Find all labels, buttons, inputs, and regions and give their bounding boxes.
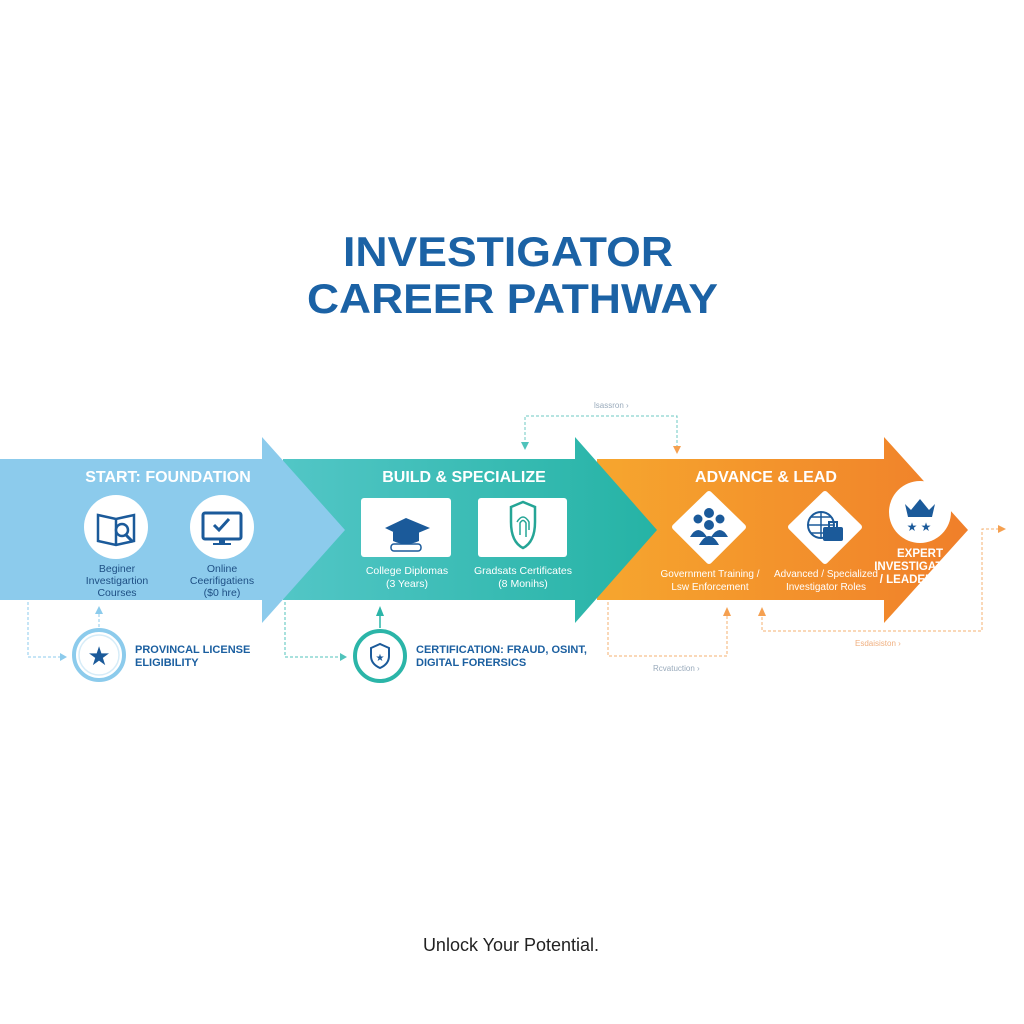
title: INVESTIGATOR	[343, 228, 673, 275]
text: expert investigator: EXPERT	[897, 548, 943, 560]
icon: graduation cap card	[361, 498, 451, 557]
text: expert investigator: / LEADERSHIP	[880, 574, 961, 586]
arrow: build & specialize: BUILD & SPECIALIZE	[382, 469, 546, 486]
text: graduate certificates: (8 Monihs)	[498, 578, 548, 590]
arrow: advance & lead	[597, 437, 968, 623]
arrow: start foundation	[0, 437, 345, 623]
text: beginner courses: Beginer	[99, 563, 136, 575]
text: expert investigator: INVESTIGATOR /	[874, 561, 967, 573]
arrow: start foundation: START: FOUNDATION	[85, 469, 251, 486]
icon: monitor	[190, 495, 254, 559]
text: graduate certificates: Gradsats Certificates	[474, 565, 572, 577]
text: online certifications: Ceerifigatiens	[190, 575, 254, 587]
badge: provincial license	[74, 630, 250, 680]
text: beginner courses: Investigartion	[86, 575, 148, 587]
icon: globe briefcase diamond	[791, 494, 859, 561]
text: beginner courses: Courses	[97, 587, 137, 599]
text: college diplomas: (3 Years)	[386, 578, 428, 590]
text: government training: Lsw Enforcement	[671, 582, 749, 593]
arrow: advance & lead: ADVANCE & LEAD	[695, 469, 837, 486]
badge: provincial license: ELIGIBILITY	[135, 657, 199, 669]
icon: crown circle	[889, 481, 951, 543]
small faint labels: Esdaisiston ›	[855, 639, 901, 648]
badge: certification: CERTIFICATION: FRAUD, OSINT,	[416, 644, 587, 656]
connectors dashed	[28, 416, 1000, 657]
icon: team diamond	[675, 494, 743, 561]
badge: certification: ★	[376, 653, 385, 664]
badge: certification: DIGITAL FORERSICS	[416, 657, 526, 669]
tagline: Unlock Your Potential.	[423, 935, 599, 955]
badge: provincial license: PROVINCAL LICENSE	[135, 644, 250, 656]
icon: fingerprint shield card	[478, 498, 567, 557]
small faint labels: Rcvatuction ›	[653, 664, 700, 673]
icon: crown circle: ★ ★	[907, 520, 931, 534]
title	[307, 228, 718, 322]
title: CAREER PATHWAY	[307, 275, 718, 322]
badge: certification	[355, 631, 587, 681]
arrow: build & specialize	[283, 437, 657, 623]
text: college diplomas: College Diplomas	[366, 565, 448, 577]
arrowheads	[60, 442, 1006, 661]
text: online certifications: Online	[207, 563, 237, 575]
badge: provincial license: ★	[87, 641, 111, 671]
text: online certifications: ($0 hre)	[204, 587, 240, 599]
text: government training: Government Training /	[661, 569, 760, 580]
small faint labels: lsassron ›	[594, 401, 629, 410]
text: advanced roles: Advanced / Specialized	[774, 569, 878, 580]
small faint labels	[594, 401, 901, 673]
text: advanced roles: Investigator Roles	[786, 582, 866, 593]
icon: book magnifier	[84, 495, 148, 559]
